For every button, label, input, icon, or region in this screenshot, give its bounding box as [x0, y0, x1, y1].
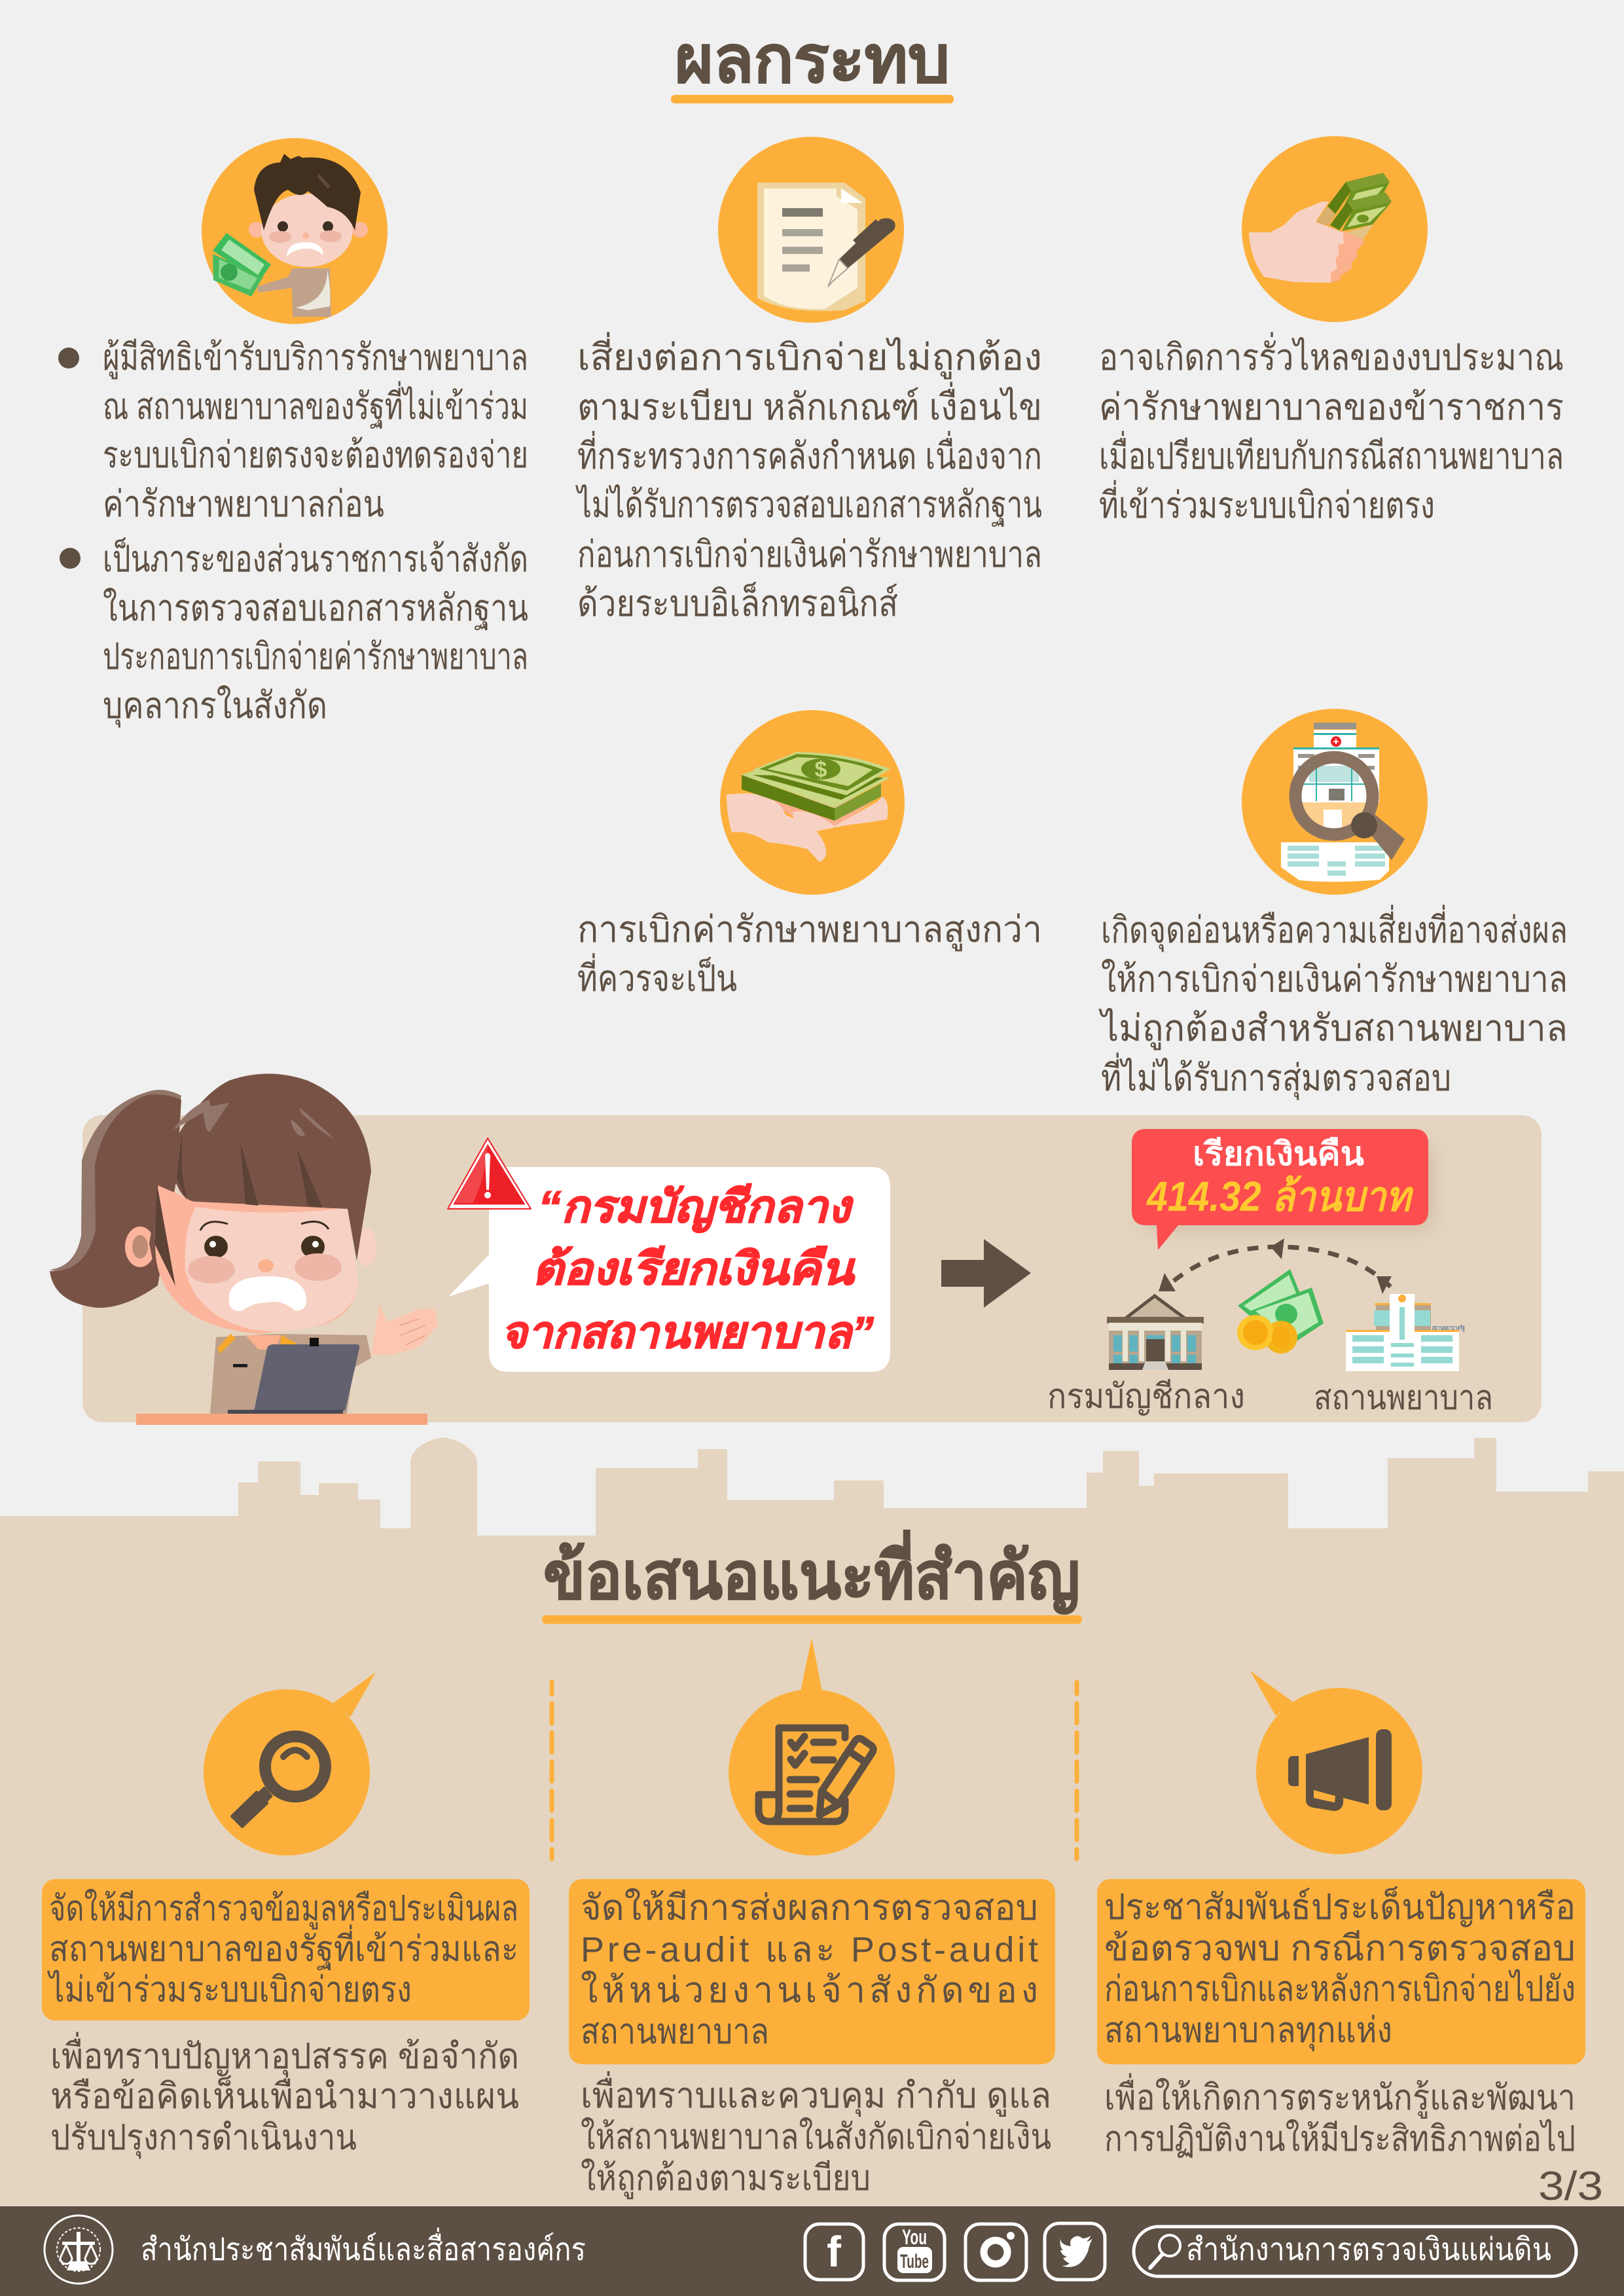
- speech bubble with quote: ต้องเรียกเงินคืน: [532, 1244, 856, 1294]
- icon: organization seal: [45, 2215, 113, 2284]
- title: ผลกระทบ: ผลกระทบ: [675, 23, 950, 96]
- impact 2 text: ไม่ได้รับการตรวจสอบเอกสารหลักฐาน: [575, 484, 1042, 526]
- recommendation 2 purpose: ให้ถูกต้องตามระเบียบ: [581, 2158, 871, 2199]
- flow diagram: money returned: [1159, 1238, 1397, 1294]
- impact 5: icon hospital under magnifier: [1242, 709, 1428, 895]
- icon: facebook: f: [827, 2227, 842, 2276]
- label: hospital: สถานพยาบาล: [1314, 1379, 1493, 1417]
- icon: twitter: [1045, 2223, 1105, 2280]
- recommendation 1 box: ไม่เข้าร่วมระบบเบิกจ่ายตรง: [47, 1969, 412, 2009]
- impact 4 text: การเบิกค่ารักษาพยาบาลสูงกว่า: [577, 908, 1042, 952]
- icon: instagram: [965, 2224, 1026, 2280]
- heading: ข้อเสนอแนะที่สำคัญ: ข้อเสนอแนะที่สำคัญ: [543, 1530, 1080, 1615]
- impact 1 bullet text: ประกอบการเบิกจ่ายค่ารักษาพยาบาล: [103, 636, 528, 677]
- icon: hospital: สถานพยาบาลรัฐ: [1432, 1325, 1465, 1332]
- callout: refund amount: [1132, 1129, 1434, 1250]
- impact 4: icon money stack on hand: [720, 710, 905, 895]
- impact 4: icon money stack on hand: $: [815, 757, 827, 782]
- callout: refund amount: เรียกเงินคืน: [1193, 1136, 1364, 1172]
- panel: refund demand: [50, 1073, 1542, 1425]
- impact 3 text: อาจเกิดการรั่วไหลของงบประมาณ: [1099, 332, 1564, 378]
- impact 4 text: ที่ควรจะเป็น: [577, 953, 737, 999]
- impact 5 text: [1098, 905, 1568, 1100]
- impact 2 text: เสี่ยงต่อการเบิกจ่ายไม่ถูกต้อง: [577, 332, 1042, 380]
- impact 5 text: ไม่ถูกต้องสำหรับสถานพยาบาล: [1098, 1007, 1568, 1050]
- recommendation 3 purpose: [1104, 2073, 1576, 2159]
- recommendation 1 purpose: เพื่อทราบปัญหาอุปสรรค ข้อจำกัด: [50, 2032, 519, 2078]
- impact 1 bullet text: ผู้มีสิทธิเข้ารับบริการรักษาพยาบาล: [103, 336, 528, 380]
- impact 1 bullet text: ณ สถานพยาบาลของรัฐที่ไม่เข้าร่วม: [103, 381, 528, 428]
- impact 3: icon hand with money: [1242, 136, 1428, 322]
- impact 1 bullet text: ระบบเบิกจ่ายตรงจะต้องทดรองจ่าย: [103, 434, 528, 475]
- recommendation 3 purpose: เพื่อให้เกิดการตระหนักรู้และพัฒนา: [1104, 2073, 1576, 2119]
- impact 3 text: ค่ารักษาพยาบาลของข้าราชการ: [1099, 386, 1564, 427]
- impact 2 text: ด้วยระบบอิเล็กทรอนิกส์: [577, 581, 898, 624]
- recommendation 3 icon: megaphone: [1250, 1671, 1422, 1854]
- recommendation 2 purpose: [581, 2071, 1051, 2199]
- search pill: [1134, 2227, 1576, 2276]
- label: comptroller department: กรมบัญชีกลาง: [1047, 1378, 1245, 1416]
- impact 1: icon civil servant holding money: [202, 138, 388, 324]
- icon: youtube: [884, 2224, 945, 2280]
- recommendation 2 box: Pre-audit และ Post-audit: [581, 1930, 1038, 1969]
- dashed dividers: [552, 1682, 1077, 1859]
- impact 1 bullet text: ในการตรวจสอบเอกสารหลักฐาน: [103, 587, 528, 630]
- recommendation 2 box: [569, 1879, 1055, 2064]
- arrow: [941, 1239, 1031, 1308]
- character: worried officer: [50, 1073, 438, 1425]
- recommendation 2 purpose: เพื่อทราบและควบคุม กำกับ ดูแล: [581, 2071, 1051, 2117]
- impact 3 text: ที่เข้าร่วมระบบเบิกจ่ายตรง: [1099, 480, 1435, 526]
- icon: youtube: Tube: [900, 2251, 929, 2272]
- impact 2 text: ที่กระทรวงการคลังกำหนด เนื่องจาก: [577, 431, 1042, 476]
- recommendation 1 purpose: ปรับปรุงการดำเนินงาน: [50, 2118, 357, 2159]
- page number: 3/3: [1538, 2164, 1603, 2209]
- impact 2 text: ตามระเบียบ หลักเกณฑ์ เงื่อนไข: [577, 382, 1042, 427]
- recommendation 2 box: จัดให้มีการส่งผลการตรวจสอบ: [581, 1888, 1038, 1928]
- recommendation 1 box: สถานพยาบาลของรัฐที่เข้าร่วมและ: [49, 1924, 518, 1970]
- recommendation 3 box: [1097, 1879, 1585, 2064]
- callout: refund amount: 414.32 ล้านบาท: [1146, 1173, 1414, 1220]
- impact 1 bullet text: เป็นภาระของส่วนราชการเจ้าสังกัด: [103, 537, 528, 579]
- recommendation 3 box: ข้อตรวจพบ กรณีการตรวจสอบ: [1104, 1929, 1576, 1968]
- recommendation 1 box: จัดให้มีการสำรวจข้อมูลหรือประเมินผล: [49, 1888, 518, 1929]
- recommendation 1 icon: magnifier: [204, 1672, 376, 1856]
- recommendation 1 purpose: [50, 2032, 519, 2159]
- footer organization name: สำนักประชาสัมพันธ์และสื่อสารองค์กร: [141, 2227, 586, 2267]
- recommendation 1 purpose: หรือข้อคิดเห็นเพื่อนำมาวางแผน: [50, 2072, 519, 2116]
- speech bubble with quote: “กรมบัญชีกลาง: [538, 1182, 854, 1233]
- recommendation 2 box: สถานพยาบาล: [581, 2012, 769, 2051]
- recommendation 3 box: สถานพยาบาลทุกแห่ง: [1104, 2011, 1392, 2052]
- impact 5 text: ที่ไม่ได้รับการสุ่มตรวจสอบ: [1101, 1052, 1451, 1100]
- icon: comptroller building: [1107, 1294, 1204, 1370]
- impact 4 text: [577, 908, 1042, 999]
- speech bubble with quote: [448, 1167, 890, 1372]
- impact 1 bullet text: ค่ารักษาพยาบาลก่อน: [103, 483, 384, 524]
- impact 2 text: ก่อนการเบิกจ่ายเงินค่ารักษาพยาบาล: [577, 533, 1042, 575]
- speech bubble with quote: จากสถานพยาบาล”: [501, 1308, 874, 1357]
- recommendation 2 box: ให้หน่วยงานเจ้าสังกัดของ: [581, 1970, 1038, 2010]
- impact 1 bullet text: [58, 336, 528, 728]
- impact 1 bullet text: บุคลากรในสังกัด: [103, 685, 327, 728]
- icon: money and coins: [1237, 1269, 1324, 1354]
- impact 2: icon document and pen: [718, 137, 904, 323]
- icon: facebook: [805, 2224, 863, 2280]
- impact 3 text: [1099, 332, 1564, 526]
- recommendation 2 icon: checklist and pencil: [729, 1638, 895, 1856]
- recommendation 2 purpose: ให้สถานพยาบาลในสังกัดเบิกจ่ายเงิน: [581, 2117, 1051, 2157]
- recommendation 1 box: [42, 1879, 530, 2020]
- recommendation 3 box: ประชาสัมพันธ์ประเด็นปัญหาหรือ: [1104, 1886, 1576, 1927]
- impact 2 text: [575, 332, 1042, 624]
- icon: youtube: You: [902, 2225, 927, 2249]
- skyline background: [0, 1437, 1624, 2207]
- footer bar: [0, 2206, 1624, 2296]
- icon: hospital: [1346, 1294, 1465, 1371]
- search pill: สำนักงานการตรวจเงินแผ่นดิน: [1186, 2233, 1551, 2267]
- icon: warning triangle: [448, 1138, 531, 1209]
